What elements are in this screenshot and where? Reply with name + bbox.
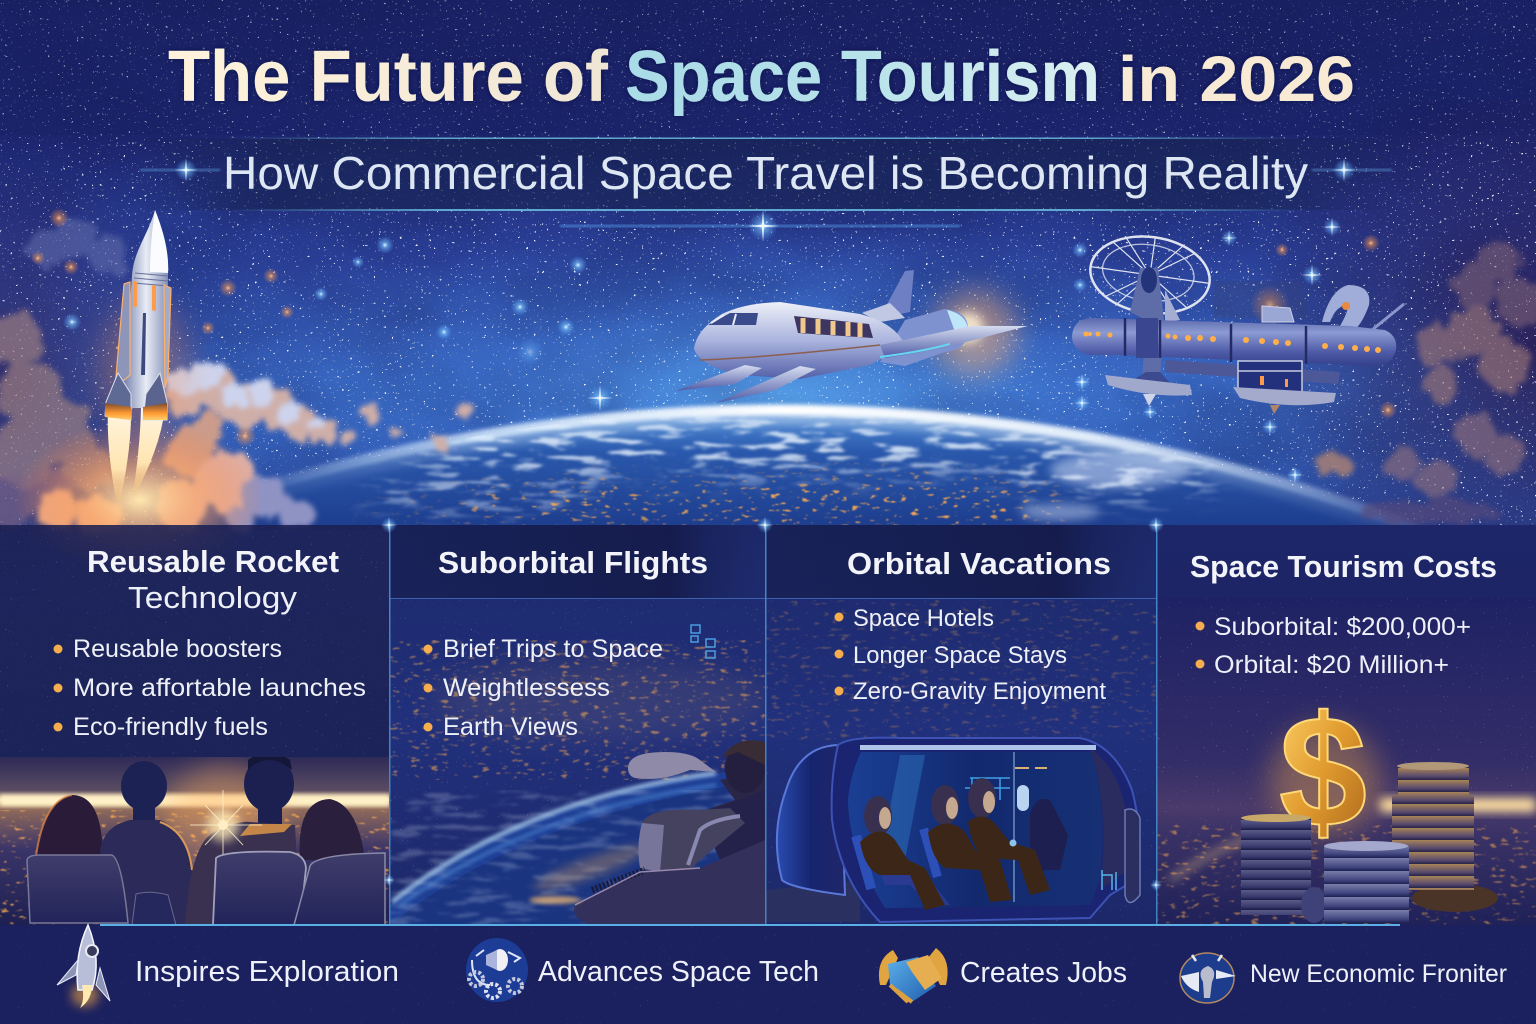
label: new economic frontier: New Economic Froniter [1250, 960, 1507, 988]
panel 3 bullet list: Zero-Gravity Enjoyment [853, 678, 1106, 705]
subtitle band [130, 138, 1400, 211]
label: inspires exploration: Inspires Exploration [135, 956, 399, 988]
icon: small hologram glyph [691, 625, 715, 658]
seated travellers [851, 778, 1068, 910]
panel 1 bullet list: Eco-friendly fuels [73, 713, 268, 741]
panel 3 scene: orbital capsule cabin [766, 738, 1140, 922]
title: The Future of: The Future of [168, 37, 609, 117]
panel 1 bullet list: More affortable launches [73, 674, 366, 702]
title: Space Tourism: Space Tourism [625, 37, 1100, 117]
icon: handshake [879, 948, 948, 1002]
title band [168, 37, 1355, 117]
panel 1 heading: Reusable Rocket [87, 544, 339, 579]
panel 2 heading: Suborbital Flights [438, 545, 708, 580]
panel 2 bullet list: Earth Views [443, 713, 578, 741]
panel: orbital vacations [766, 525, 1156, 925]
subtitle: How Commercial Space Travel is Becoming Reality [223, 147, 1308, 199]
panel 3 heading: Orbital Vacations [847, 546, 1111, 581]
clouds: left [0, 220, 470, 535]
label: advances space tech: Advances Space Tech [538, 956, 819, 988]
panel 4 bullet list: Suborbital: $200,000+ [1214, 613, 1471, 641]
panel: space tourism costs [1157, 525, 1536, 925]
panel 4 heading: Space Tourism Costs [1190, 549, 1497, 584]
panel 2 bullet list: Brief Trips to Space [443, 635, 663, 663]
label: creates jobs: Creates Jobs [960, 957, 1127, 989]
panel 2 bullet list [424, 635, 663, 741]
clouds: right [1314, 238, 1536, 524]
panel 1 text backdrop [0, 525, 389, 757]
icon: silver rocket [57, 925, 110, 1008]
panel 1 bullet list [54, 635, 366, 741]
panel 1 scene: passengers watching horizon [0, 752, 389, 925]
panel 3 bullet list: Longer Space Stays [853, 642, 1067, 669]
icon: gold dollar sign: $ [1279, 684, 1367, 860]
coin stacks [1241, 762, 1498, 923]
illustration: passenger spaceplane [675, 270, 1028, 403]
illustration: space station [1072, 229, 1404, 414]
stars and lens glints [31, 208, 1397, 483]
icon: space tech gears [466, 938, 528, 1002]
panel 4 bullet list: Orbital: $20 Million+ [1214, 651, 1449, 679]
panel 1 heading: Technology [128, 580, 298, 615]
illustration: rocket launch [15, 210, 265, 580]
footer bar [0, 924, 1536, 1024]
panel dividers [381, 517, 1164, 925]
title: in 2026: in 2026 [1118, 43, 1355, 115]
icon: economic frontier globe [1180, 953, 1236, 1003]
panel 2 scene: seated passenger [529, 740, 765, 925]
panel 2 scene: earth curve [390, 772, 765, 925]
panel 3 bullet list: Space Hotels [853, 605, 994, 632]
panel 1 heading [87, 544, 339, 615]
panel 3 bullet list [834, 605, 1106, 705]
panel 1 bullet list: Reusable boosters [73, 635, 282, 663]
panel 2 bullet list: Weightlessess [443, 674, 610, 702]
panel: suborbital flights [390, 525, 770, 925]
people silhouettes [36, 752, 365, 925]
seats [27, 852, 385, 925]
earth horizon [153, 401, 1420, 530]
panel 4 bullet list [1196, 613, 1471, 679]
panel: reusable rocket technology [0, 525, 389, 925]
